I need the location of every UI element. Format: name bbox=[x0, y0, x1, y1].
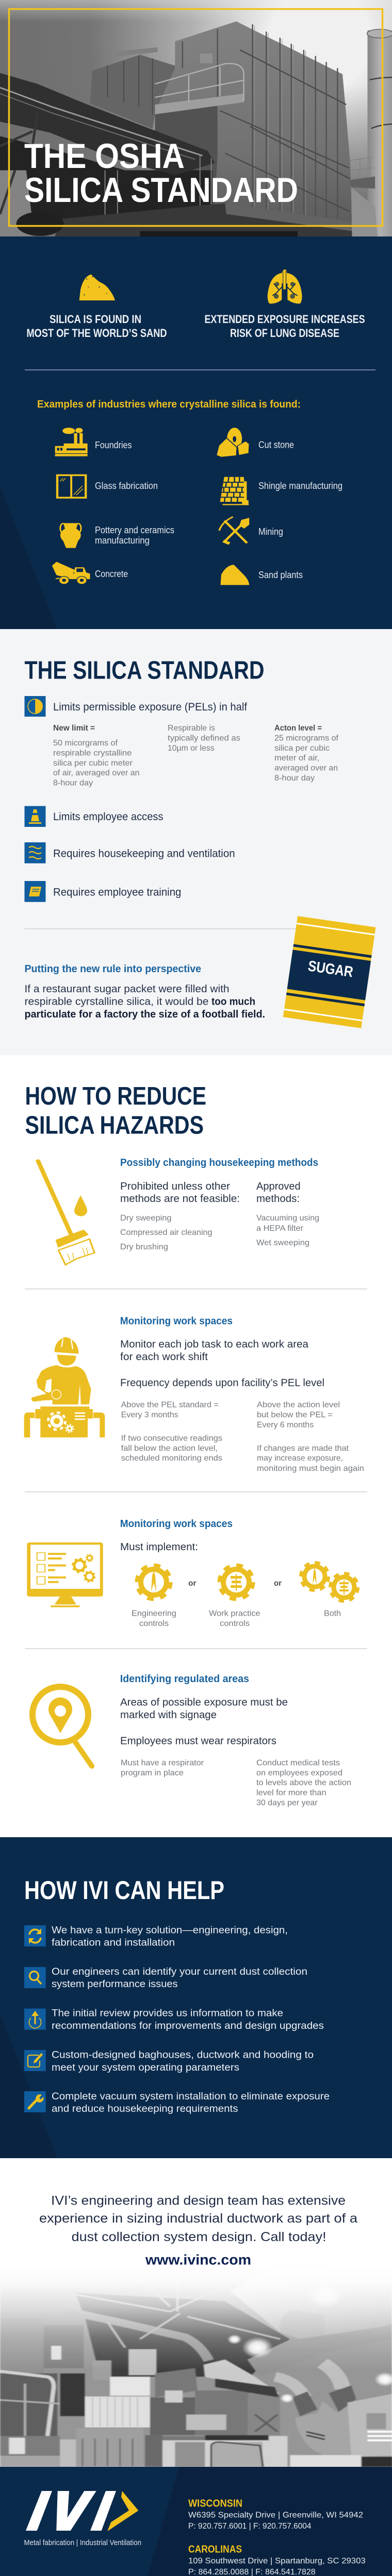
icon: upload arrow bbox=[24, 2009, 46, 2030]
logo: IVI bbox=[26, 2491, 138, 2531]
label: sand plants: Sand plants bbox=[258, 570, 303, 580]
hero photo: industrial baghouse bbox=[0, 0, 392, 236]
text block: respirable definition: Respirable is bbox=[168, 724, 215, 733]
text block: monitoring work spaces: Every 3 months bbox=[121, 1411, 178, 1419]
text block: monitoring work spaces: monitoring must begin again bbox=[257, 1464, 364, 1473]
text: identify performance issues bbox=[52, 1967, 307, 1990]
text: custom-designed baghouses bbox=[52, 2049, 314, 2073]
address: Wisconsin: P: 920.757.6001 | F: 920.757.6004 bbox=[188, 2522, 312, 2531]
text block: possibly changing housekeeping methods: methods are not feasible: bbox=[120, 1193, 240, 1205]
text block: action level: Acton level = bbox=[274, 724, 322, 733]
panel: how IVI can help background bbox=[0, 1837, 392, 2158]
text block: identifying regulated areas: Employees must wear respirators bbox=[120, 1736, 276, 1747]
icon: broom and drop bbox=[38, 1161, 94, 1265]
label: shingle manufacturing: Shingle manufacturing bbox=[258, 481, 342, 491]
icon: mining tools bbox=[219, 517, 249, 544]
heading: how to reduce silica hazards: SILICA HAZARDS bbox=[25, 1112, 204, 1140]
text: or second: or bbox=[274, 1579, 282, 1588]
text block: possibly changing housekeeping methods: Dry sweeping bbox=[120, 1214, 171, 1223]
text block: identifying regulated areas: 30 days per year bbox=[256, 1799, 318, 1807]
icon: monitor gears bbox=[72, 1554, 95, 1582]
label: pottery and ceramics bbox=[95, 525, 174, 546]
label: cut stone: Cut stone bbox=[258, 440, 294, 450]
text block: action level: averaged over an bbox=[274, 764, 338, 773]
text block: possibly changing housekeeping methods: Compressed air cleaning bbox=[120, 1228, 213, 1237]
text block: monitoring work spaces: Above the action level bbox=[257, 1401, 340, 1410]
text: turn-key solution: We have a turn-key solution—engineering, design, bbox=[52, 1925, 288, 1936]
panel: how to reduce background bbox=[0, 1055, 392, 1837]
label: pottery and ceramics: manufacturing bbox=[95, 535, 150, 546]
text block: action level: silica per cubic bbox=[274, 744, 330, 753]
text block: possibly changing housekeeping methods: Vacuuming using bbox=[256, 1214, 319, 1223]
text: silica found in sand: MOST OF THE WORLD’S SAND bbox=[27, 327, 167, 340]
icon: cut stone bbox=[216, 428, 249, 457]
icon: work practice controls gear bbox=[220, 1566, 253, 1599]
labels: control types: Work practice bbox=[209, 1609, 260, 1618]
icon: sugar packet bbox=[283, 916, 375, 1028]
text: custom-designed baghouses: meet your system operating parameters bbox=[52, 2062, 239, 2073]
icon: shingles bbox=[220, 477, 249, 505]
text block: monitoring work spaces: scheduled monitoring ends bbox=[121, 1454, 222, 1463]
text block: respirable definition bbox=[168, 724, 240, 753]
icon: glass window bbox=[57, 474, 86, 498]
address: Carolinas bbox=[188, 2544, 366, 2576]
label: pottery and ceramics: Pottery and ceramics bbox=[95, 525, 174, 535]
text block: action level: meter of air, bbox=[274, 754, 320, 762]
text: employee training: Requires employee training bbox=[53, 886, 181, 899]
text: limits employee access: Limits employee access bbox=[53, 811, 163, 823]
text block: new limit: of air, averaged over an bbox=[53, 769, 139, 777]
panel: footer background bbox=[0, 2467, 392, 2576]
text block: new limit: silica per cubic meter bbox=[53, 759, 133, 768]
text block: identifying regulated areas: Areas of possible exposure must be bbox=[120, 1697, 288, 1708]
text block: possibly changing housekeeping methods: Prohibited unless other bbox=[120, 1181, 230, 1192]
text block: call to action: IVI’s engineering and design team has extensive bbox=[51, 2194, 346, 2208]
text block: monitoring work spaces: but below the PEL = bbox=[257, 1411, 333, 1419]
text: limits permissible exposure: Limits permissible exposure (PELs) in half bbox=[53, 701, 247, 713]
text block: respirable definition: 10µm or less bbox=[168, 744, 215, 753]
heading: how IVI can help: HOW IVI CAN HELP bbox=[24, 1876, 224, 1905]
labels: control types: controls bbox=[139, 1619, 169, 1628]
address: Wisconsin: WISCONSIN bbox=[188, 2498, 242, 2509]
text block: action level bbox=[274, 724, 339, 783]
icon: traffic cone bbox=[25, 806, 45, 827]
text block: monitoring work spaces: Monitor each job task to each work area bbox=[120, 1339, 309, 1350]
text block: putting the new rule into perspective bbox=[25, 963, 265, 1020]
text block: new limit: New limit = bbox=[53, 724, 95, 733]
text block: monitoring work spaces: for each work shift bbox=[120, 1351, 208, 1363]
text block: monitoring work spaces: Every 6 months bbox=[257, 1421, 314, 1430]
text block: putting the new rule into perspective: If a restaurant sugar packet were filled with bbox=[25, 984, 229, 995]
icon: sugar packet: SUGAR bbox=[307, 958, 354, 980]
text block: monitoring work spaces: Above the PEL standard = bbox=[121, 1401, 219, 1410]
text: initial review: The initial review provides us information to make bbox=[52, 2008, 283, 2019]
text block: call to action: dust collection system design. Call today! bbox=[72, 2230, 326, 2244]
text block: possibly changing housekeeping methods: Dry brushing bbox=[120, 1243, 168, 1251]
heading: how to reduce silica hazards: HOW TO REDUCE bbox=[25, 1082, 206, 1110]
icon: sand plant pile bbox=[221, 565, 249, 585]
logo tagline: Metal fabrication | Industrial Ventilation bbox=[24, 2538, 141, 2547]
text: turn-key solution: fabrication and installation bbox=[52, 1937, 175, 1948]
text block: monitoring work spaces: Monitoring work spaces bbox=[120, 1316, 233, 1327]
text block: identifying regulated areas: level for more than bbox=[256, 1789, 326, 1798]
text: custom-designed baghouses: Custom-designed baghouses, ductwork and hooding to bbox=[52, 2049, 314, 2061]
text: or: or bbox=[188, 1579, 196, 1588]
text block: possibly changing housekeeping methods: Wet sweeping bbox=[256, 1239, 309, 1247]
text block: new limit: 50 micorgrams of bbox=[53, 739, 118, 748]
main title bbox=[24, 137, 298, 210]
text block: new limit bbox=[53, 724, 139, 788]
text block: call to action bbox=[39, 2194, 357, 2244]
labels: control types: controls bbox=[220, 1619, 250, 1628]
text block: possibly changing housekeeping methods: Approved bbox=[256, 1181, 301, 1192]
text block: identifying regulated areas bbox=[120, 1673, 351, 1807]
text: identify performance issues: system performance issues bbox=[52, 1979, 178, 1990]
icon: half circle bbox=[25, 696, 45, 717]
text block: monitoring work spaces: may increase exposure, bbox=[257, 1454, 343, 1463]
icon: turn-key cycle bbox=[24, 1925, 46, 1946]
text block: new limit: 8-hour day bbox=[53, 779, 93, 788]
icon: wrench bbox=[24, 2091, 46, 2112]
heading: the silica standard: THE SILICA STANDARD bbox=[25, 656, 264, 684]
text: complete vacuum system: Complete vacuum system installation to eliminate exposure bbox=[52, 2091, 330, 2102]
text block: must implement bbox=[120, 1518, 233, 1553]
text: website: www.ivinc.com bbox=[145, 2252, 251, 2268]
text block: possibly changing housekeeping methods: Possibly changing housekeeping methods bbox=[120, 1157, 318, 1168]
icon: sand pile bbox=[79, 275, 115, 300]
icon: training book bbox=[25, 881, 45, 902]
hero yellow frame bbox=[9, 9, 383, 226]
text: initial review: recommendations for improvements and design upgrades bbox=[52, 2021, 324, 2031]
text: complete vacuum system bbox=[52, 2091, 330, 2114]
label: concrete: Concrete bbox=[95, 569, 128, 579]
text: silica found in sand bbox=[27, 313, 167, 340]
icon: engineering controls gear bbox=[137, 1566, 170, 1599]
text block: identifying regulated areas: to levels above the action bbox=[256, 1778, 351, 1787]
text block: identifying regulated areas: program in place bbox=[121, 1769, 184, 1777]
heading: examples of industries: Examples of industries where crystalline silica is found: bbox=[37, 399, 301, 410]
address: Wisconsin bbox=[188, 2498, 363, 2531]
text: lung disease risk bbox=[204, 313, 365, 340]
label: glass fabrication: Glass fabrication bbox=[95, 481, 158, 491]
text block: must implement: Must implement: bbox=[120, 1541, 198, 1553]
heading: how to reduce silica hazards bbox=[25, 1082, 206, 1140]
main title: THE OSHA bbox=[24, 137, 185, 176]
main title: SILICA STANDARD bbox=[24, 171, 298, 210]
text: turn-key solution bbox=[52, 1925, 288, 1948]
text: identify performance issues: Our engineers can identify your current dust collection bbox=[52, 1967, 307, 1977]
icon: computer monitor checklist bbox=[27, 1543, 103, 1607]
icon: edit pencil bbox=[24, 2050, 46, 2071]
text block: call to action: experience in sizing industrial ductwork as part of a bbox=[39, 2211, 357, 2226]
address: Wisconsin: W6395 Specialty Drive | Greenville, WI 54942 bbox=[188, 2511, 363, 2520]
text block: respirable definition: typically defined as bbox=[168, 734, 240, 743]
text block: putting the new rule into perspective: respirable cyrstalline silica, it would be bbox=[25, 996, 208, 1008]
icon: magnifier with location pin bbox=[32, 1687, 92, 1766]
panel: navy intro background bbox=[0, 236, 392, 629]
text block: identifying regulated areas: Must have a respirator bbox=[121, 1758, 204, 1767]
text block: possibly changing housekeeping methods: methods: bbox=[256, 1193, 300, 1205]
icon: pottery vase bbox=[60, 523, 81, 548]
labels: control types bbox=[132, 1609, 341, 1628]
text block: new limit: respirable crystalline bbox=[53, 749, 132, 757]
text block: monitoring work spaces bbox=[120, 1316, 364, 1473]
icon: lungs bbox=[268, 269, 302, 303]
panel: silica standard background bbox=[0, 629, 392, 1055]
text block: putting the new rule into perspective: Putting the new rule into perspective bbox=[25, 963, 201, 975]
icon: concrete truck bbox=[52, 562, 90, 584]
text block: action level: 25 micrograms of bbox=[274, 734, 339, 743]
text block: putting the new rule into perspective: too much bbox=[211, 996, 255, 1008]
icon: magnifying glass bbox=[24, 1967, 46, 1988]
icon: foundry bbox=[55, 428, 88, 456]
text block: monitoring work spaces: Frequency depends upon facility’s PEL level bbox=[120, 1378, 324, 1389]
icon: ventilation waves bbox=[25, 842, 45, 863]
text block: action level: 8-hour day bbox=[274, 774, 315, 783]
text block: identifying regulated areas: Conduct medical tests bbox=[256, 1758, 340, 1767]
text block: identifying regulated areas: on employees exposed bbox=[256, 1769, 342, 1777]
text block: monitoring work spaces: If changes are made that bbox=[257, 1444, 349, 1453]
label: foundries: Foundries bbox=[95, 440, 132, 450]
text block: possibly changing housekeeping methods: a HEPA filter bbox=[256, 1224, 304, 1233]
text block: must implement: Monitoring work spaces bbox=[120, 1518, 233, 1530]
icon: both gears bbox=[301, 1563, 358, 1601]
address: Carolinas: CAROLINAS bbox=[188, 2544, 242, 2555]
labels: control types: Both bbox=[324, 1609, 341, 1618]
label: mining: Mining bbox=[258, 527, 283, 537]
text block: identifying regulated areas: Identifying regulated areas bbox=[120, 1673, 249, 1685]
text block: possibly changing housekeeping methods bbox=[120, 1157, 319, 1251]
text block: monitoring work spaces: If two consecutive readings bbox=[121, 1434, 222, 1443]
text: lung disease risk: RISK OF LUNG DISEASE bbox=[230, 327, 339, 340]
labels: control types: Engineering bbox=[132, 1609, 176, 1618]
text: housekeeping and ventilation: Requires housekeeping and ventilation bbox=[53, 848, 235, 859]
photo: ductwork interior with white fade bbox=[0, 2267, 392, 2467]
text: complete vacuum system: and reduce housekeeping requirements bbox=[52, 2104, 238, 2114]
text: initial review bbox=[52, 2008, 324, 2031]
icon: worker at machine bbox=[24, 1337, 105, 1437]
text block: putting the new rule into perspective: particulate for a factory the size of a football field. bbox=[25, 1009, 265, 1020]
text: silica found in sand: SILICA IS FOUND IN bbox=[50, 313, 141, 326]
text block: identifying regulated areas: marked with signage bbox=[120, 1709, 217, 1721]
text block: monitoring work spaces: fall below the action level, bbox=[121, 1444, 218, 1453]
address: Carolinas: 109 Southwest Drive | Spartanburg, SC 29303 bbox=[188, 2556, 366, 2565]
